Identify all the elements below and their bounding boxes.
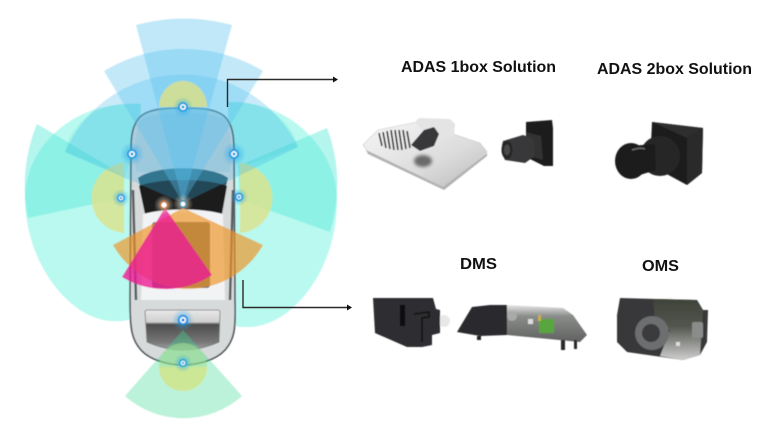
camera marker: right side bbox=[230, 188, 248, 206]
product: DMS windshield unit bbox=[457, 305, 587, 350]
coverage: rear camera sector bbox=[125, 330, 242, 418]
camera marker: DMS cabin bbox=[154, 195, 174, 215]
coverage: front wide sector bbox=[65, 74, 298, 203]
coverage: right mirror sector bbox=[228, 102, 298, 168]
coverage: OMS orange cabin sector bbox=[113, 208, 263, 289]
heading: ADAS 1box Solution: ADAS 1box Solution bbox=[401, 59, 556, 76]
car sunroof bbox=[152, 222, 210, 288]
car rear window bbox=[145, 310, 220, 350]
heading: DMS: DMS bbox=[460, 256, 497, 273]
coverage: rear near zone top bbox=[159, 367, 207, 391]
camera marker: OMS cabin bbox=[173, 194, 193, 214]
heading: ADAS 2box Solution: ADAS 2box Solution bbox=[597, 61, 752, 78]
camera marker: front bbox=[173, 97, 193, 117]
diagram: car with sensor coverage bbox=[25, 19, 337, 418]
product: ADAS 1box camera bbox=[502, 120, 553, 166]
coverage: right side wide zone bbox=[226, 102, 337, 327]
car interior bbox=[139, 180, 227, 214]
coverage: front long sector bbox=[136, 19, 232, 203]
coverage: front mid sector bbox=[104, 49, 263, 203]
coverage: right rear-side sector bbox=[238, 128, 337, 232]
car outer shell bbox=[130, 108, 235, 365]
arrow: cabin cameras to DMS and OMS products bbox=[243, 280, 352, 310]
coverage: left side wide zone bbox=[25, 104, 141, 321]
camera marker: left mirror bbox=[120, 142, 144, 166]
car hood bbox=[135, 113, 231, 172]
camera marker: rear window bbox=[172, 309, 194, 331]
car roof bbox=[141, 210, 225, 300]
icon: front near zone bbox=[159, 81, 207, 107]
product: ADAS 2box camera bbox=[615, 122, 703, 185]
car body bbox=[130, 108, 235, 365]
camera marker: left side bbox=[112, 189, 130, 207]
icon: left side blind spot zone bbox=[92, 163, 124, 233]
right body trim bbox=[230, 190, 233, 300]
coverage: left rear-side sector bbox=[25, 124, 125, 218]
left body trim bbox=[133, 190, 136, 300]
coverage: DMS magenta sector bbox=[122, 208, 212, 289]
coverage: rear near zone bbox=[159, 343, 207, 391]
arrow: front camera to ADAS products bbox=[228, 76, 338, 107]
camera marker: right mirror bbox=[222, 142, 246, 166]
icon: right side blind spot zone bbox=[240, 163, 272, 233]
camera marker: rear bumper bbox=[174, 354, 192, 372]
car rear bumper bbox=[141, 350, 225, 365]
heading: OMS: OMS bbox=[642, 258, 679, 275]
product: DMS camera module bbox=[373, 298, 450, 347]
product: OMS camera module bbox=[617, 298, 708, 360]
coverage: left mirror sector bbox=[65, 104, 141, 176]
car windshield bbox=[138, 168, 228, 190]
product: ADAS 1box control unit bbox=[363, 118, 487, 190]
